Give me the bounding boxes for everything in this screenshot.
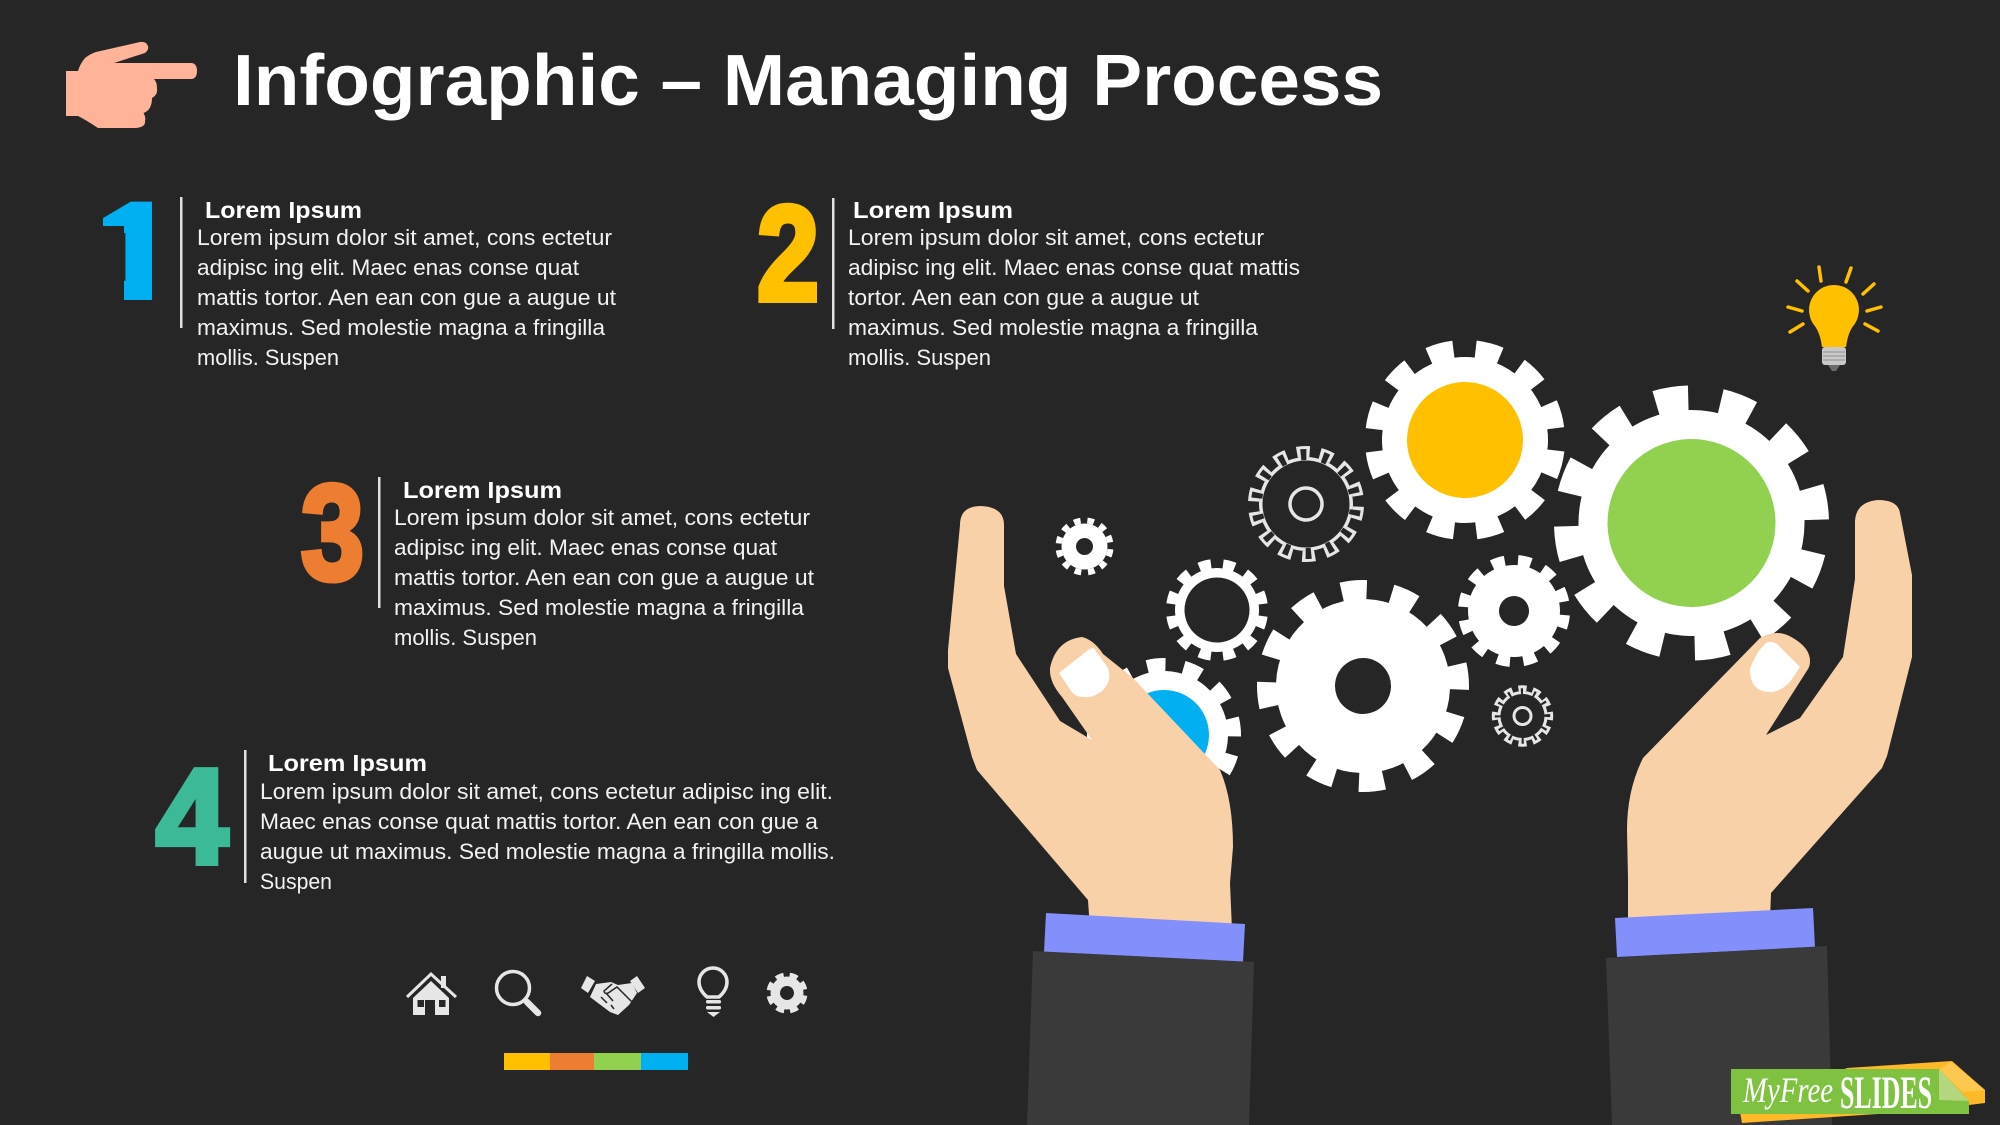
right sleeve — [1606, 946, 1832, 1125]
body text 4: Suspen — [260, 869, 332, 894]
heading 3: Lorem Ipsum — [403, 477, 562, 503]
body text 3: mattis tortor. Aen ean con gue a augue ut — [394, 565, 814, 590]
left cuff — [1044, 913, 1245, 962]
icon: home — [407, 974, 456, 1015]
panel: step 4 — [156, 741, 835, 894]
number 3: 3 — [301, 457, 364, 608]
right thumb nail — [1750, 642, 1800, 692]
logo page fold — [1939, 1069, 1969, 1101]
logo green body — [1731, 1069, 1969, 1114]
body text 2: tortor. Aen ean con gue a augue ut — [848, 285, 1199, 310]
body text 4 — [260, 779, 835, 894]
right cuff — [1615, 908, 1815, 957]
body text 4: augue ut maximus. Sed molestie magna a fringilla mollis. — [260, 839, 835, 864]
gear: blue — [1072, 643, 1256, 827]
icon: handshake — [581, 976, 645, 1015]
gear: small white — [1053, 515, 1116, 578]
number 4: 4 — [156, 741, 228, 892]
right hand skin — [1627, 500, 1912, 920]
heading 2: Lorem Ipsum — [853, 197, 1013, 223]
divider 2 — [832, 198, 834, 329]
left hand — [948, 506, 1254, 1125]
body text 1 — [197, 225, 616, 370]
icon: pointing hand — [66, 42, 197, 128]
body text 3: adipisc ing elit. Maec enas conse quat — [394, 535, 777, 560]
body text 4: Lorem ipsum dolor sit amet, cons ectetur adipisc ing elit. — [260, 779, 833, 804]
colour bar — [504, 1053, 688, 1070]
body text 1: maximus. Sed molestie magna a fringilla — [197, 315, 606, 340]
heading 1: Lorem Ipsum — [205, 197, 362, 223]
body text 1: Lorem ipsum dolor sit amet, cons ectetur — [197, 225, 612, 250]
gear: yellow — [1354, 329, 1576, 551]
right hand — [1606, 500, 1912, 1125]
panel: step 1 — [103, 197, 616, 370]
body text 2: maximus. Sed molestie magna a fringilla — [848, 315, 1259, 340]
icon: outline bulb — [699, 968, 727, 1017]
body text 1: mollis. Suspen — [197, 345, 339, 370]
gear: medium white — [1454, 551, 1574, 671]
logo ribbon fold — [1939, 1062, 1985, 1092]
body text 2: adipisc ing elit. Maec enas conse quat mattis — [848, 255, 1300, 280]
body text 3: mollis. Suspen — [394, 625, 537, 650]
left thumb nail — [1059, 648, 1109, 697]
gear: outline small — [1495, 688, 1550, 744]
body text 3: maximus. Sed molestie magna a fringilla — [394, 595, 805, 620]
body text 2: mollis. Suspen — [848, 345, 991, 370]
heading 4: Lorem Ipsum — [268, 750, 427, 776]
gear: big white — [1235, 558, 1491, 814]
icon row — [407, 968, 811, 1017]
panel: step 3 — [301, 457, 814, 650]
divider 4 — [244, 750, 246, 883]
icon: gear — [763, 969, 811, 1017]
gear: green — [1530, 362, 1853, 684]
number 1: 1 — [97, 178, 179, 329]
icon: glowing light bulb — [1788, 267, 1881, 371]
gear: ring — [1161, 554, 1273, 666]
body text 1: adipisc ing elit. Maec enas conse quat — [197, 255, 579, 280]
body text 2: Lorem ipsum dolor sit amet, cons ectetur — [848, 225, 1264, 250]
body text 4: Maec enas conse quat mattis tortor. Aen ean con gue a — [260, 809, 819, 834]
gear: outline large — [1245, 443, 1367, 565]
icon: magnifier — [496, 972, 538, 1013]
divider 3 — [378, 477, 380, 608]
logo yellow ribbon — [1740, 1061, 1985, 1123]
logo: MyFree Slides — [1731, 1061, 1985, 1123]
body text 1: mattis tortor. Aen ean con gue a augue ut — [197, 285, 616, 310]
left hand skin — [948, 506, 1233, 930]
logo script text: MyFree — [1742, 1070, 1833, 1110]
body text 3: Lorem ipsum dolor sit amet, cons ectetur — [394, 505, 810, 530]
title: Infographic – Managing Process — [233, 41, 1383, 121]
left sleeve — [1027, 951, 1254, 1125]
body text 2 — [848, 225, 1300, 370]
panel: step 2 — [757, 178, 1300, 370]
divider 1 — [180, 197, 182, 328]
number 2: 2 — [757, 178, 819, 329]
body text 3 — [394, 505, 814, 650]
